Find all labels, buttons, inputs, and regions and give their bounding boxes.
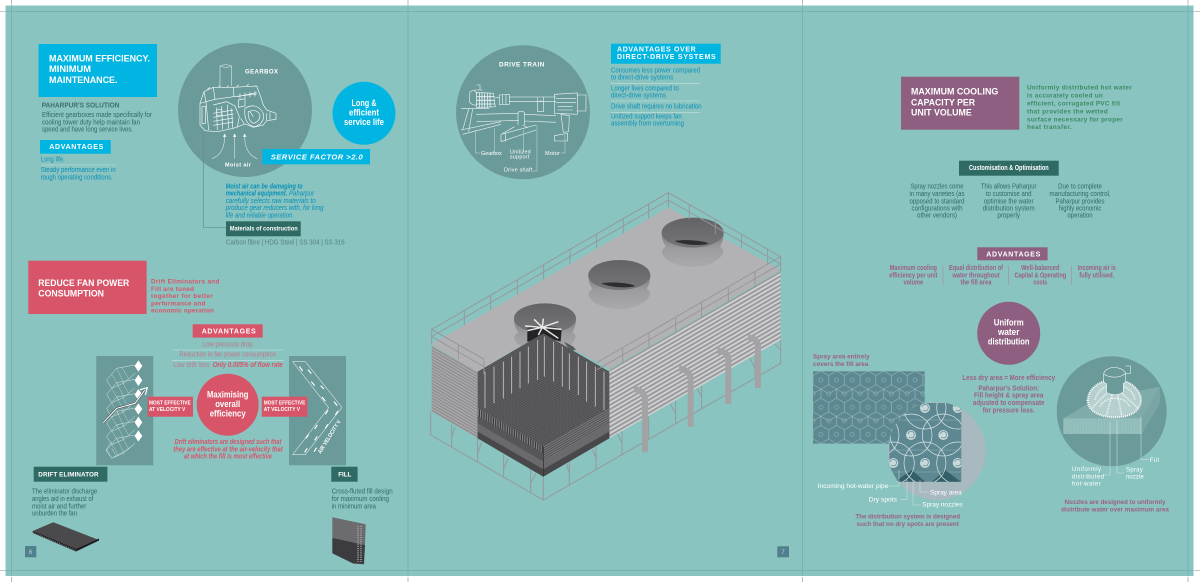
advantages list: red: Only 0.005% of flow rate bbox=[213, 362, 283, 369]
callout: maximising overall efficiency: Maximising bbox=[207, 390, 248, 400]
text block: moist air note: mechanical equipment. bbox=[226, 191, 287, 198]
text block: drift eliminators and fill: Drift Eliminators and bbox=[151, 279, 219, 286]
text column: customise: to customise and bbox=[986, 191, 1032, 198]
advantages list: rough operating conditions. bbox=[41, 175, 113, 182]
cooling tower illustration bbox=[431, 193, 781, 500]
text column: customise: This allows Paharpur bbox=[981, 184, 1037, 191]
text block: moist air note: produce gear reducers with, for long bbox=[225, 205, 323, 212]
text block: spray area: covers the fill area bbox=[813, 361, 869, 368]
text column: manufacturing control: highly economic bbox=[1059, 205, 1102, 212]
text block: fill description: Cross-fluted fill design bbox=[332, 489, 393, 496]
advantages list: direct drive: direct-drive systems bbox=[611, 93, 666, 100]
nozzle circle: Fill bbox=[1150, 458, 1159, 464]
text block: moist air note bbox=[225, 183, 323, 219]
text column: spray nozzles: Spray nozzles come bbox=[910, 184, 964, 191]
panel: fill diagram bbox=[289, 356, 346, 465]
base frame bbox=[431, 340, 781, 500]
text block: moist air note: Moist air can be damaging to bbox=[226, 183, 303, 190]
text block: drift eliminator design note: at which the fill is most effective bbox=[184, 453, 272, 460]
heading box: maximum cooling capacity bbox=[901, 77, 1019, 130]
handrail bbox=[432, 193, 781, 374]
advantages columns: purple: efficiency per unit bbox=[889, 272, 938, 279]
text block: less dry area bbox=[962, 375, 1055, 414]
advantages list: direct drive: Drive shaft requires no lubrication bbox=[611, 103, 702, 110]
text block: drift eliminators and fill: Fill are tuned bbox=[151, 286, 194, 293]
advantages columns: purple: volume bbox=[903, 279, 923, 286]
heading box: maximum cooling capacity: CAPACITY PER bbox=[911, 97, 975, 107]
advantages list: direct drive: to direct-drive systems bbox=[611, 75, 674, 82]
icon: drive train bbox=[461, 85, 586, 142]
advantages columns: purple: Well-balanced bbox=[1021, 265, 1059, 272]
nozzle circle: Uniformly bbox=[1072, 467, 1101, 473]
label: drift eliminator: DRIFT ELIMINATOR bbox=[38, 472, 99, 479]
text column: manufacturing control: Due to complete bbox=[1058, 184, 1102, 191]
advantages label: red: ADVANTAGES bbox=[202, 328, 256, 335]
panel: drift eliminator diagram bbox=[96, 356, 153, 465]
advantages list: Long life. bbox=[41, 157, 65, 164]
text block: nozzle design note: Nozzles are designed to uniformly bbox=[1064, 499, 1166, 506]
icon: fill block bbox=[332, 517, 366, 564]
text block: uniformly distributed hot water: that provides the wetted bbox=[1027, 108, 1108, 115]
text block: nozzle design note: distribute water over maximum area bbox=[1061, 506, 1169, 513]
panel: hexagonal spray pattern bbox=[813, 371, 925, 444]
fan stack 3 bbox=[662, 218, 724, 267]
drive train circle: DRIVE TRAIN bbox=[499, 61, 545, 68]
text block: no dry spots: The distribution system is designed bbox=[855, 514, 960, 521]
text column: manufacturing control: manufacturing control, bbox=[1049, 191, 1111, 198]
advantages columns: purple: the fill area bbox=[960, 279, 992, 286]
drive train circle: support bbox=[510, 154, 530, 160]
text column: manufacturing control bbox=[1049, 184, 1111, 219]
text column: spray nozzles: configurations with bbox=[912, 205, 963, 212]
magnifier: spray detail bbox=[888, 402, 986, 500]
callout: long and efficient service life: Long & bbox=[352, 98, 377, 108]
label: most effective right: AT VELOCITY V bbox=[264, 407, 300, 413]
text block: fill description bbox=[332, 489, 393, 510]
text block: no dry spots: such that no dry spots are present bbox=[857, 521, 960, 528]
downpipes bbox=[634, 337, 758, 452]
text block: fill description: for maximum cooling bbox=[332, 496, 389, 503]
fan stack 2 bbox=[588, 260, 650, 309]
text block: nozzle design note bbox=[1061, 499, 1169, 513]
text block: drift eliminators and fill: economic operation bbox=[151, 307, 214, 314]
text block: less dry area: Paharpur's Solution: bbox=[978, 385, 1039, 392]
text block: uniformly distributed hot water: efficient, corrugated PVC fill bbox=[1027, 100, 1120, 107]
labels: spray diagram: Dry spots bbox=[869, 497, 897, 503]
cutaway fill bbox=[478, 333, 609, 477]
text block: fill description: in minimum area bbox=[332, 503, 376, 510]
advantages list: direct drive: assembly from overturning bbox=[611, 121, 684, 128]
text block: spray area: Spray area entirely bbox=[813, 354, 870, 361]
nozzle circle: nozzle bbox=[1126, 475, 1144, 481]
label: drift eliminator bbox=[34, 467, 107, 482]
text block: drift eliminator design note: Drift eliminators are designed such that bbox=[175, 439, 282, 446]
label: advantages over direct-drive systems: ADVANTAGES OVER bbox=[617, 47, 696, 54]
text block: drift eliminator design note: they are effective at the air-velocity that bbox=[173, 446, 283, 453]
page number 7 bbox=[777, 546, 789, 557]
text block: drift eliminator description: moist air and further bbox=[32, 503, 87, 510]
labels: spray diagram bbox=[818, 470, 963, 509]
gearbox circle: GEARBOX bbox=[245, 70, 278, 76]
text column: manufacturing control: operation bbox=[1067, 212, 1093, 219]
advantages label: ADVANTAGES bbox=[49, 144, 104, 151]
text column: spray nozzles bbox=[910, 184, 965, 219]
text block: spray area bbox=[813, 354, 870, 368]
callout: service factor: SERVICE FACTOR >2.0 bbox=[271, 152, 363, 162]
arrows: moist air bbox=[212, 134, 257, 159]
labels: spray diagram: Spray area bbox=[930, 491, 962, 497]
heading box: reduce fan power: REDUCE FAN POWER bbox=[38, 278, 130, 288]
nozzle circle: Spray bbox=[1126, 468, 1143, 474]
text block: less dry area: for pressure loss. bbox=[983, 407, 1035, 414]
text block: uniformly distributed hot water: is accurately cooled un bbox=[1027, 92, 1103, 99]
advantages list: red bbox=[172, 341, 284, 369]
icon: gearbox bbox=[200, 65, 276, 132]
text block: moist air note: carefully selects raw materials to bbox=[226, 198, 316, 205]
icon: drift eliminator block bbox=[33, 522, 99, 552]
nozzle circle bbox=[1057, 356, 1167, 487]
tower deck bbox=[432, 207, 781, 372]
advantages columns: purple: Equal distribution of bbox=[949, 265, 1004, 272]
text column: manufacturing control: Paharpur provides bbox=[1056, 198, 1105, 205]
label: advantages over direct-drive systems bbox=[611, 44, 721, 64]
gearbox circle: Moist air bbox=[225, 163, 252, 169]
text column: spray nozzles: other vendors) bbox=[917, 212, 957, 219]
drive train circle: Gearbox bbox=[481, 151, 502, 157]
callout: long and efficient service life bbox=[332, 82, 396, 145]
text block: drift eliminator description: The eliminator discharge bbox=[32, 489, 97, 496]
leaders: drive train bbox=[475, 125, 565, 171]
label: advantages over direct-drive systems: DIRECT-DRIVE SYSTEMS bbox=[617, 54, 716, 61]
arrow: air path bbox=[103, 388, 147, 423]
advantages columns: purple bbox=[889, 265, 1116, 286]
text block: Paharpur's solution: PAHARPUR'S SOLUTION bbox=[42, 102, 119, 110]
leader line bbox=[203, 132, 226, 227]
callout: service factor bbox=[262, 149, 370, 164]
advantages list: red: Reduction in fan power consumption bbox=[179, 352, 276, 359]
text block: Paharpur's solution: Efficient gearboxes made specifically for bbox=[42, 112, 153, 119]
callout: maximising overall efficiency bbox=[197, 374, 259, 436]
text block: moist air note: life and reliable operation. bbox=[226, 212, 294, 219]
drive train circle bbox=[456, 45, 590, 179]
advantages list: direct drive: Consumes less power compared bbox=[611, 68, 700, 75]
advantages list: Steady performance even in bbox=[41, 167, 116, 174]
labels: spray diagram: Incoming hot-water pipe bbox=[818, 484, 889, 490]
text block: uniformly distributed hot water: surface necessary for proper bbox=[1027, 116, 1123, 123]
heading box: maximum efficiency: MAINTENANCE. bbox=[49, 75, 118, 85]
advantages label: purple bbox=[977, 247, 1048, 260]
text block: drift eliminator description: unburden the fan bbox=[32, 510, 77, 517]
label: most effective left bbox=[148, 397, 193, 417]
heading box: maximum efficiency: MINIMUM bbox=[49, 64, 91, 74]
text column: customise: distribution system bbox=[983, 205, 1035, 212]
advantages columns: purple: water throughout bbox=[952, 272, 1000, 279]
spray pipes bbox=[485, 337, 604, 410]
heading box: maximum efficiency bbox=[38, 44, 157, 97]
gearbox circle bbox=[178, 43, 312, 177]
label: materials of construction bbox=[226, 221, 301, 236]
text block: drift eliminator description: angles aid in exhaust of bbox=[32, 496, 93, 503]
page number 7: 7 bbox=[781, 550, 785, 556]
heading box: maximum cooling capacity: UNIT VOLUME bbox=[911, 108, 972, 118]
callout: uniform water distribution: water bbox=[997, 327, 1020, 337]
label: most effective right bbox=[262, 397, 307, 417]
text block: Paharpur's solution: speed and have long service lives. bbox=[42, 126, 133, 134]
label: customisation and optimisation bbox=[959, 161, 1059, 176]
label: most effective right: MOST EFFECTIVE bbox=[264, 400, 306, 406]
text column: customise: optimise the water bbox=[984, 198, 1034, 205]
callout: uniform water distribution bbox=[977, 302, 1040, 365]
text: materials list: Carbon fibre | HDG Steel | SS 304 | SS 316 bbox=[226, 240, 345, 247]
label: most effective left: MOST EFFECTIVE bbox=[149, 400, 191, 406]
text block: drift eliminator description bbox=[32, 489, 97, 517]
advantages columns: purple: Capital & Operating bbox=[1014, 272, 1066, 279]
text block: no dry spots bbox=[855, 514, 960, 528]
text column: spray nozzles: opposed to standard bbox=[910, 198, 965, 205]
text block: Paharpur's solution: cooling tower duty help maintain fan bbox=[42, 119, 140, 126]
text block: drift eliminators and fill bbox=[151, 279, 219, 314]
drive train circle: Unitized bbox=[510, 150, 531, 156]
heading box: maximum cooling capacity: MAXIMUM COOLING bbox=[911, 87, 998, 97]
page number 6: 6 bbox=[29, 550, 33, 556]
callout: long and efficient service life: service life bbox=[344, 117, 384, 127]
advantages columns: purple: Maximum cooling bbox=[890, 265, 937, 272]
nozzle circle: hot-water bbox=[1072, 481, 1101, 487]
advantages list: red: Low drift loss bbox=[173, 362, 210, 369]
text column: customise bbox=[981, 184, 1037, 219]
advantages list: direct drive: Unitized support keeps fan bbox=[611, 114, 682, 121]
advantages label: purple: ADVANTAGES bbox=[986, 251, 1041, 258]
label: fill: FILL bbox=[338, 472, 351, 479]
heading box: reduce fan power: CONSUMPTION bbox=[38, 289, 104, 299]
panel: maximum efficiency bbox=[38, 44, 157, 182]
heading box: reduce fan power bbox=[28, 261, 147, 314]
text column: customise: properly bbox=[997, 212, 1020, 219]
text block: uniformly distributed hot water: heat transfer. bbox=[1027, 124, 1072, 131]
text block: less dry area: Fill height & spray area bbox=[974, 393, 1043, 400]
text block: uniformly distributed hot water bbox=[1027, 84, 1132, 131]
advantages list: direct drive bbox=[611, 68, 702, 128]
label: customisation and optimisation: Customisation & Optimisation bbox=[969, 165, 1049, 172]
callout: maximising overall efficiency: efficiency bbox=[210, 409, 246, 419]
text block: drift eliminator design note bbox=[173, 439, 283, 460]
text: air velocity: AIR VELOCITY V bbox=[317, 419, 343, 455]
heading box: maximum efficiency: MAXIMUM EFFICIENCY. bbox=[49, 54, 150, 64]
text block: drift eliminators and fill: performance and bbox=[151, 300, 205, 307]
callout: uniform water distribution: Uniform bbox=[994, 318, 1024, 328]
fan stack 1 bbox=[514, 303, 576, 353]
label: materials of construction: Materials of construction bbox=[230, 226, 298, 232]
text block: Paharpur's solution bbox=[42, 102, 153, 134]
advantages list: direct drive: Longer lives compared to bbox=[611, 86, 679, 93]
leaders: nozzle bbox=[1104, 417, 1149, 475]
label: most effective left: AT VELOCITY V bbox=[149, 407, 186, 413]
tower right face bbox=[609, 271, 781, 438]
advantages label: red bbox=[193, 324, 263, 338]
text column: spray nozzles: in many varieties (as bbox=[910, 191, 965, 198]
advantages list: red: Low pressure drop bbox=[203, 341, 253, 348]
text block: less dry area: adjusted to compensate bbox=[973, 400, 1045, 407]
advantages list bbox=[41, 157, 116, 182]
drive train circle: Drive shaft bbox=[504, 168, 533, 174]
callout: long and efficient service life: efficient bbox=[349, 108, 379, 118]
text block: less dry area: Less dry area = More efficiency bbox=[962, 375, 1055, 382]
advantages columns: purple: costs bbox=[1033, 279, 1047, 286]
label: fill bbox=[331, 467, 358, 482]
page number 6 bbox=[25, 546, 36, 557]
callout: maximising overall efficiency: overall bbox=[215, 399, 240, 409]
drive train circle: Motor bbox=[545, 151, 560, 157]
callout: uniform water distribution: distribution bbox=[988, 336, 1030, 346]
text block: moist air note: Paharpur bbox=[289, 191, 315, 198]
icon: spray nozzle over fill bbox=[1063, 366, 1160, 434]
tower left face bbox=[432, 345, 478, 438]
text block: uniformly distributed hot water: Uniformly distributed hot water bbox=[1027, 84, 1132, 91]
nozzle circle: distributed bbox=[1072, 474, 1104, 480]
advantages columns: purple: fully utilised. bbox=[1079, 272, 1114, 279]
text block: drift eliminators and fill: together for better bbox=[151, 293, 213, 300]
labels: spray diagram: Spray nozzles bbox=[922, 503, 963, 509]
advantages columns: purple: Incoming air is bbox=[1078, 265, 1116, 272]
